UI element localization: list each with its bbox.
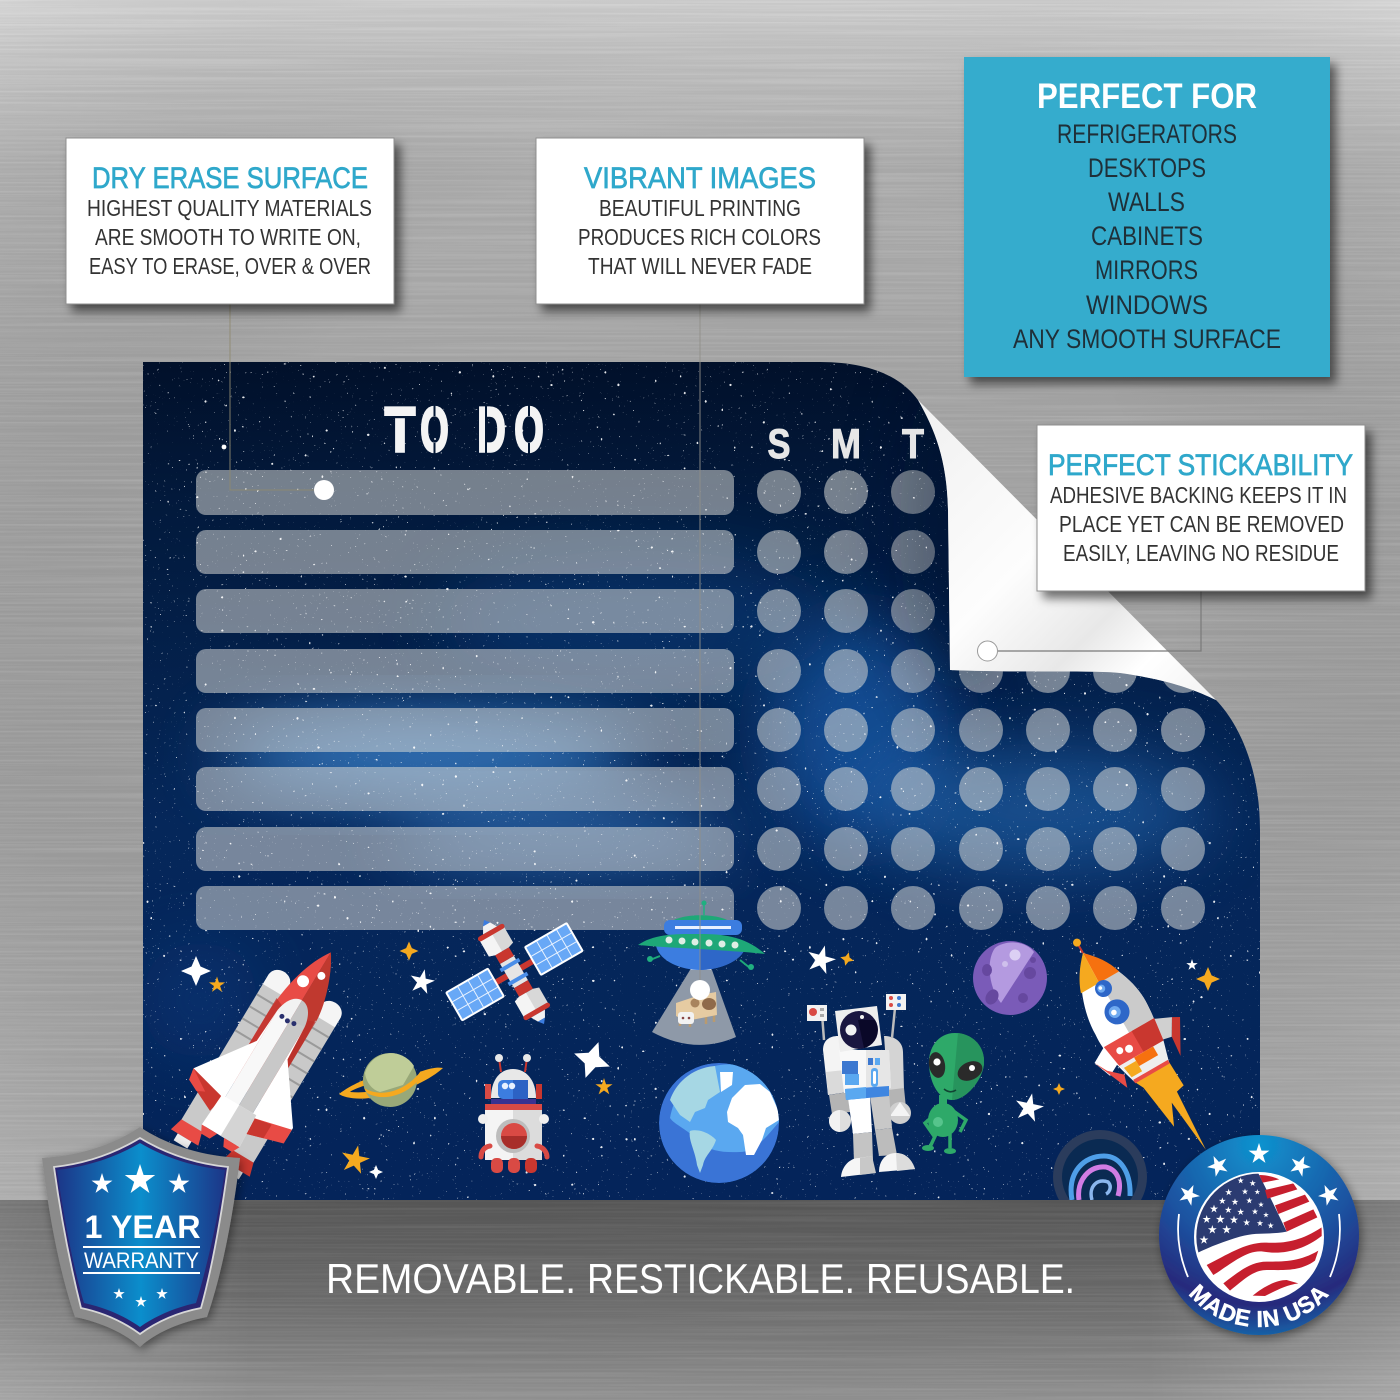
slogan <box>326 1255 1075 1302</box>
panel: perfect stickability callout: PERFECT STICKABILITY <box>1048 449 1353 482</box>
icon: alien <box>922 1033 986 1154</box>
panel: perfect for list: ANY SMOOTH SURFACE <box>1013 324 1281 354</box>
panel: vibrant images callout: THAT WILL NEVER FADE <box>588 253 812 279</box>
panel: perfect for list: CABINETS <box>1091 221 1203 251</box>
panel: perfect for list: REFRIGERATORS <box>1057 119 1237 149</box>
title: TO DO stencil <box>384 406 543 456</box>
panel: vibrant images callout: BEAUTIFUL PRINTING <box>599 195 801 221</box>
leader line: dry erase <box>230 304 334 500</box>
panel: dry erase surface callout: EASY TO ERASE, OVER & OVER <box>89 253 371 279</box>
title: TO DO stencil: O <box>514 396 544 465</box>
icon: ufo with tractor beam and cow <box>638 900 765 1045</box>
badge: 1 year warranty shield: WARRANTY <box>84 1248 199 1273</box>
decorative space stars <box>181 445 1220 1179</box>
peeled corner of poster <box>918 400 1216 700</box>
badge: 1 year warranty shield <box>42 1127 240 1347</box>
weekday letters: T <box>902 420 924 467</box>
icon: earth <box>659 1063 779 1183</box>
panel: perfect for list: DESKTOPS <box>1088 153 1206 183</box>
panel: perfect stickability callout: PLACE YET CAN BE REMOVED <box>1059 511 1344 537</box>
panel: vibrant images callout: VIBRANT IMAGES <box>584 162 816 195</box>
slogan: REUSABLE. <box>866 1255 1075 1302</box>
panel: perfect for list: MIRRORS <box>1095 255 1198 285</box>
icon: purple planet <box>973 941 1047 1015</box>
icon: robot <box>478 1054 549 1173</box>
slogan: RESTICKABLE. <box>587 1255 855 1302</box>
icon: shuttle <box>170 952 342 1180</box>
american flag <box>1193 1173 1322 1296</box>
badge: made in usa <box>1156 1132 1366 1344</box>
icon: astronaut <box>807 994 915 1177</box>
weekday check circles <box>757 470 1205 930</box>
panel: dry erase surface callout <box>66 138 394 304</box>
title: TO DO stencil: D <box>478 396 506 465</box>
panel: dry erase surface callout: HIGHEST QUALITY MATERIALS <box>87 195 372 221</box>
leader line: vibrant images <box>690 304 710 1000</box>
badge: 1 year warranty shield: 1 YEAR <box>84 1209 200 1245</box>
icon: rocket <box>1073 938 1206 1150</box>
title: TO DO stencil: O <box>420 396 448 465</box>
panel: perfect for list: PERFECT FOR <box>1037 77 1257 116</box>
dark steel strip behind slogan <box>0 1200 1400 1400</box>
slogan: REMOVABLE. <box>326 1255 576 1302</box>
to-do writing rows <box>196 470 734 930</box>
panel: dry erase surface callout: ARE SMOOTH TO WRITE ON, <box>95 224 361 250</box>
panel: perfect for list: WINDOWS <box>1086 290 1208 320</box>
panel: perfect for list <box>964 57 1330 377</box>
weekday letters: S <box>768 420 790 467</box>
panel: space to-do chart poster <box>140 360 1263 1224</box>
icon: satellite <box>446 920 584 1024</box>
panel: perfect stickability callout <box>1037 425 1365 591</box>
weekday letters: M <box>831 420 861 467</box>
panel: perfect for list: WALLS <box>1108 187 1185 217</box>
panel: vibrant images callout: PRODUCES RICH COLORS <box>578 224 821 250</box>
panel: vibrant images callout <box>536 138 864 304</box>
weekday letters <box>768 428 924 459</box>
panel: perfect stickability callout: EASILY, LEAVING NO RESIDUE <box>1063 540 1339 566</box>
icon: spiral galaxy <box>1053 1130 1147 1200</box>
icon: ringed planet <box>339 1053 443 1107</box>
panel: dry erase surface callout: DRY ERASE SURFACE <box>92 162 368 195</box>
badge: made in usa: MADE IN USA <box>1188 1284 1330 1328</box>
leader line: stickability <box>978 591 1201 661</box>
title: TO DO stencil: T <box>385 396 415 465</box>
